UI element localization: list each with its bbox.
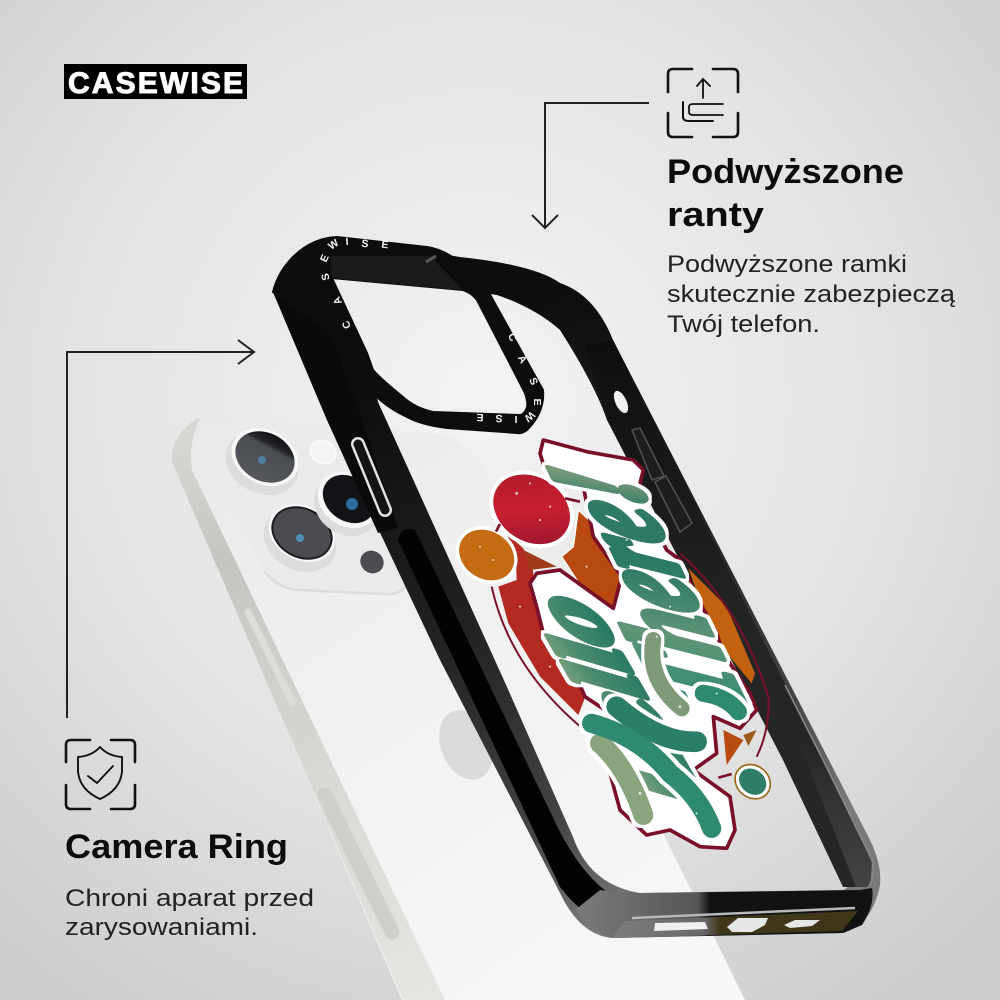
camera ring: printed brand letters: E bbox=[531, 398, 543, 406]
case: right rail volume buttons bbox=[632, 428, 692, 532]
phone volume button bbox=[325, 795, 392, 932]
case: bottom lip bbox=[612, 911, 858, 938]
artwork: lower tiny wedge bbox=[743, 730, 757, 746]
camera ring: printed brand letters: E bbox=[476, 411, 484, 423]
printed artwork: Hello There bbox=[447, 440, 777, 848]
text block: raised edges description: skutecznie zabezpieczą bbox=[667, 281, 956, 308]
lens: bottom bbox=[252, 493, 348, 584]
icon: shield check bbox=[66, 740, 135, 809]
heading: Podwyższone ranty bbox=[667, 153, 904, 234]
camera ring: printed brand letters: I bbox=[345, 236, 349, 248]
artwork: outer maroon arc bbox=[680, 553, 769, 757]
camera ring: printed brand letters: I bbox=[514, 413, 517, 425]
camera ring: printed brand letters: A bbox=[331, 294, 345, 307]
camera ring: printed brand letters: S bbox=[495, 412, 503, 424]
camera ring: printed brand letters: A bbox=[515, 353, 529, 366]
artwork: word There: There! bbox=[516, 458, 777, 716]
heading: Camera Ring: Camera Ring bbox=[65, 828, 288, 866]
camera plateau lower edge bbox=[265, 572, 408, 594]
phone: white iPhone body bbox=[172, 416, 745, 1000]
artwork: round badge bbox=[728, 757, 777, 806]
camera ring: printed brand letters: S bbox=[361, 238, 369, 250]
flash bbox=[306, 436, 340, 468]
artwork: dark red band bbox=[498, 533, 587, 715]
camera ring: printed brand letters: E bbox=[381, 239, 389, 251]
camera ring: printed brand letters: E bbox=[318, 253, 332, 264]
case: right rail inner shade bbox=[790, 720, 872, 887]
camera plateau bbox=[197, 424, 410, 594]
artwork: lettering outline bbox=[530, 440, 757, 848]
camera ring: body bbox=[273, 237, 543, 433]
phone side button bbox=[248, 612, 292, 702]
camera ring: printed brand letters bbox=[318, 236, 543, 425]
artwork: small wedge bbox=[523, 550, 557, 570]
text block: raised edges description: Twój telefon. bbox=[667, 311, 820, 338]
case: bottom lip highlight bbox=[632, 908, 855, 918]
text block: camera ring description: zarysowaniami. bbox=[65, 914, 258, 941]
arrow: camera ring bbox=[67, 340, 254, 718]
lidar sensor bbox=[356, 546, 388, 578]
text block: camera ring description bbox=[65, 885, 314, 941]
artwork: orange ellipse bbox=[447, 517, 526, 593]
camera ring: printed brand letters: S bbox=[526, 376, 540, 387]
icon: raised edges bbox=[668, 69, 738, 137]
camera ring bbox=[273, 236, 543, 433]
case: charging port bbox=[727, 918, 768, 932]
case: black frame rails bbox=[273, 237, 880, 938]
artwork: orange band on right rail bbox=[688, 568, 755, 683]
arrow: raised edges bbox=[532, 103, 649, 228]
case: left rail black slot bbox=[398, 529, 630, 927]
text block: raised edges description: Podwyższone ramki bbox=[667, 251, 907, 278]
case: right rail outer highlight bbox=[785, 685, 873, 888]
case: mic port bbox=[784, 920, 820, 928]
artwork: dashes bbox=[496, 498, 732, 778]
artwork: left maroon arc bbox=[492, 587, 588, 733]
brand logo: CASEWISE bbox=[68, 67, 243, 100]
artwork: word Hello: Hello bbox=[502, 588, 734, 816]
phone side metal band bbox=[172, 418, 445, 1000]
text block: raised edges description bbox=[667, 251, 956, 338]
case: frame body bbox=[273, 237, 880, 938]
case: bottom rail bbox=[575, 888, 873, 938]
lens: right bbox=[302, 460, 390, 548]
case: right rail dark band bbox=[585, 340, 872, 887]
artwork: lettering swashes bbox=[592, 640, 738, 828]
apple logo bbox=[429, 702, 503, 788]
camera ring: printed brand letters: W bbox=[522, 408, 537, 424]
case: right rail window bbox=[611, 389, 631, 415]
camera ring: printed brand letters: S bbox=[319, 272, 333, 282]
camera ring: inner wall bbox=[330, 256, 463, 290]
case: speaker port bbox=[654, 922, 708, 931]
case: left rail side button bbox=[358, 444, 385, 510]
lens: upper left bbox=[214, 417, 310, 507]
artwork: orange wedges bbox=[562, 510, 622, 607]
camera ring: printed brand letters: C bbox=[505, 331, 519, 344]
artwork: red ellipse bbox=[477, 458, 586, 561]
camera ring: highlight bbox=[426, 256, 436, 262]
text block: camera ring description: Chroni aparat przed bbox=[65, 885, 314, 912]
artwork: speckles bbox=[479, 482, 718, 814]
heading: Podwyższone ranty: Podwyższone bbox=[667, 153, 904, 191]
camera ring: printed brand letters: C bbox=[340, 318, 354, 331]
heading: Podwyższone ranty: ranty bbox=[667, 196, 764, 234]
case: left top dark edge bbox=[273, 270, 398, 533]
artwork: lower wedge bbox=[723, 730, 743, 765]
camera ring: printed brand letters: W bbox=[326, 237, 341, 253]
